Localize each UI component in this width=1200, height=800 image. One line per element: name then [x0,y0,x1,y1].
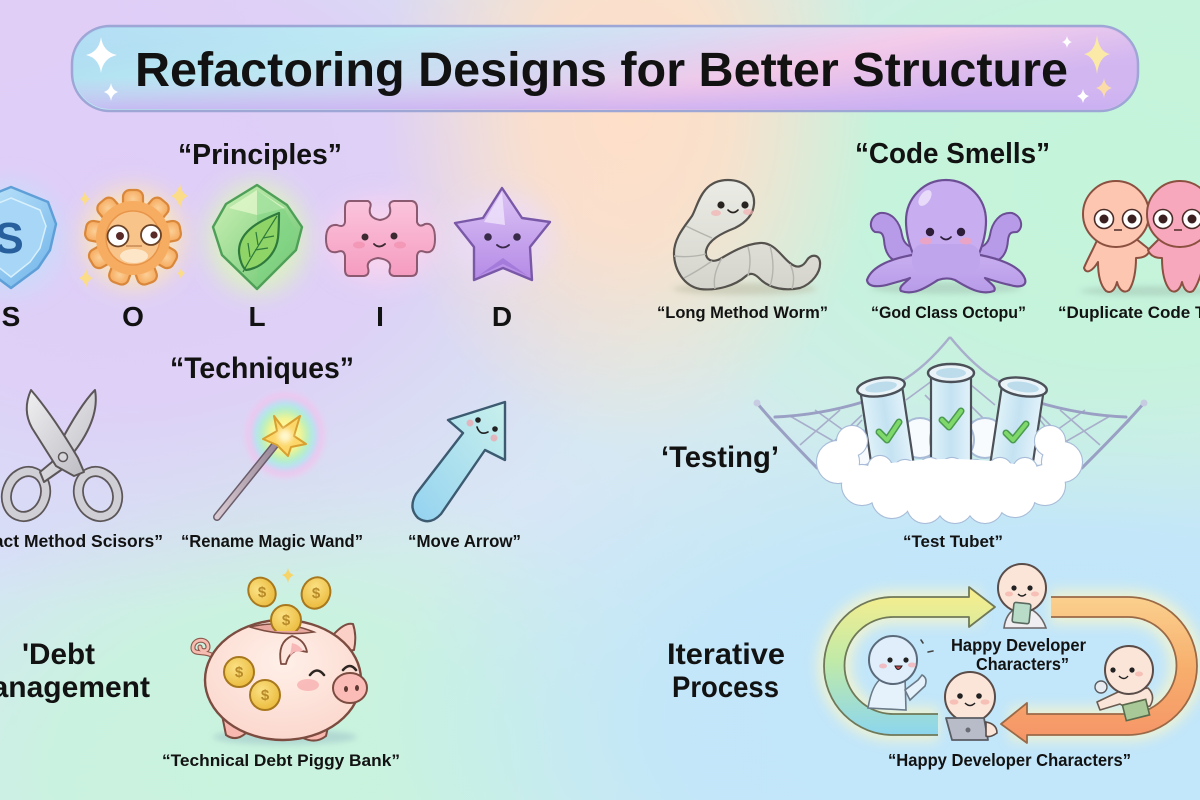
SOLID letters: L [248,301,266,332]
icon: piggy bank: $ [282,612,291,629]
icon: scissors [0,390,124,522]
icon: piggy bank: $ [258,584,267,601]
label: happy developer characters, bottom: “Happy Developer Characters” [888,750,1131,770]
heading: debt management: 'Debt [22,638,95,671]
heading: testing: ‘Testing’ [661,441,779,474]
character: bottom developer with laptop [945,672,997,740]
label: happy developer characters, inner [951,635,1086,674]
sparkles: gear [79,183,188,288]
icon: O gear [79,183,188,288]
SOLID letters: I [376,301,384,332]
character: waving developer [868,636,933,710]
label: happy developer characters, inner: Happy Developer [951,635,1086,655]
icon: I puzzle piece [325,198,437,282]
panel: iterative process [667,564,1197,770]
icon: safety net with test tubes [754,337,1148,523]
cloud front [817,426,1082,523]
heading: debt management [0,638,150,704]
test tube: right [986,375,1048,480]
icon: S shield [0,182,62,294]
heading: iterative process [667,638,785,704]
label: happy developer characters, inner: Characters” [976,654,1069,674]
test tube: middle [928,364,974,469]
panel: principles [0,139,553,332]
SOLID letters [2,301,512,332]
label: move arrow: “Move Arrow” [408,531,521,551]
heading: iterative process: Process [672,671,779,704]
icon: magic wand [217,391,326,517]
label: test tubet: “Test Tubet” [903,532,1003,551]
test tube: left [856,375,918,480]
heading: code smells: “Code Smells” [855,138,1050,170]
label: technical debt piggy bank: “Technical Debt Piggy Bank” [162,751,400,770]
icon: piggy bank: $ [261,687,270,704]
panel: techniques [0,352,521,551]
safety net [770,337,1130,467]
title banner [72,26,1138,111]
icon: duplicate code twins [1080,181,1200,296]
panel: testing [661,337,1148,551]
sparkles: banner right [1062,35,1112,103]
SOLID letters: S [2,301,20,332]
checkmarks [879,411,1026,440]
SOLID letters: D [492,301,512,332]
cloud back [842,418,1058,466]
label: long method worm: “Long Method Worm” [657,303,828,322]
arrow: left yellow-to-blue [824,587,995,735]
cycle glow [834,607,1187,724]
title text: Refactoring Designs for Better Structure [135,44,1068,97]
heading: principles: “Principles” [178,139,342,171]
icon: L leaf gem [207,182,307,294]
arrow: right orange [1001,597,1197,743]
character: top developer with phone [998,564,1046,628]
SOLID letters: O [122,301,144,332]
label: rename magic wand: “Rename Magic Wand” [181,531,363,551]
heading: iterative process: Iterative [667,638,785,671]
icon: piggy bank [193,568,367,745]
panel: code smells [657,138,1200,322]
character: right developer with money [1095,646,1153,721]
icon: piggy bank: $ [235,664,244,681]
icon: god class octopus [867,180,1025,294]
coin slot with coin [250,605,314,635]
icon: piggy bank: $ [312,585,321,602]
icon: move arrow [412,402,505,521]
panel: debt management [0,568,400,770]
icon: long method worm [673,180,820,295]
sparkles: banner left [86,37,118,101]
falling coins [243,572,335,613]
label: god class octopus: “God Class Octopu” [871,303,1026,322]
icon: D star [453,188,553,282]
coins on pig body [224,657,280,710]
heading: techniques: “Techniques” [170,352,354,385]
